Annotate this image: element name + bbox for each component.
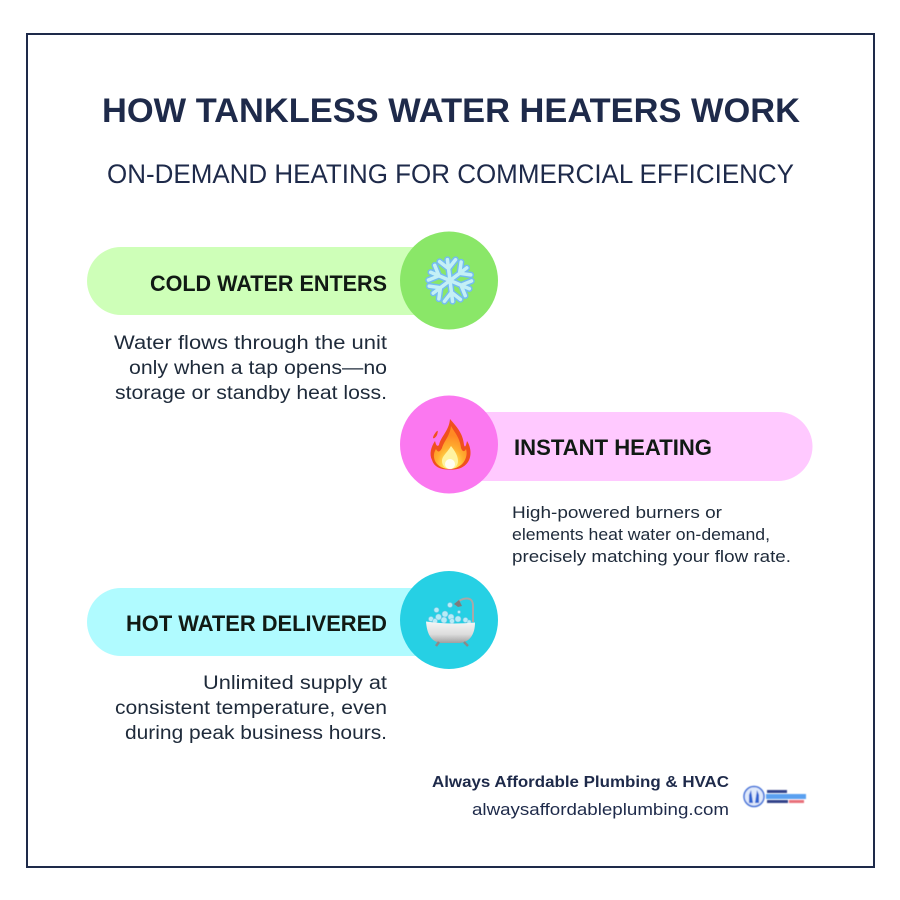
step 2: instant heating	[400, 396, 813, 566]
description: hot water: during peak business hours.	[125, 723, 387, 744]
icon: snowflake	[425, 257, 475, 304]
circle: pink	[400, 396, 498, 494]
description: cold water	[114, 333, 388, 404]
pill: instant heating	[470, 412, 813, 481]
pill: hot water	[87, 588, 430, 656]
footer: company name: Always Affordable Plumbing & HVAC	[432, 774, 729, 791]
description: cold water: Water flows through the unit	[114, 333, 388, 354]
circle: green	[400, 232, 498, 330]
description: instant heating	[512, 503, 791, 566]
description: hot water: Unlimited supply at	[203, 673, 388, 694]
heading: instant heating: INSTANT HEATING	[514, 435, 712, 460]
subtitle: ON-DEMAND HEATING FOR COMMERCIAL EFFICIENCY	[107, 159, 794, 189]
flame flick	[433, 431, 438, 438]
description: instant heating: precisely matching your flow rate.	[512, 547, 791, 566]
description: instant heating: High-powered burners or	[512, 503, 722, 522]
description: hot water: consistent temperature, even	[115, 698, 387, 719]
step 3: hot water delivered	[87, 571, 498, 744]
footer: website: alwaysaffordableplumbing.com	[472, 800, 729, 819]
icon: flame	[431, 419, 471, 470]
circle: cyan	[400, 571, 498, 669]
heading: cold water enters: COLD WATER ENTERS	[150, 271, 387, 296]
description: cold water: storage or standby heat loss.	[115, 383, 387, 404]
logo	[744, 786, 806, 806]
description: cold water: only when a tap opens—no	[129, 358, 387, 379]
description: instant heating: elements heat water on-demand,	[512, 525, 770, 544]
title: HOW TANKLESS WATER HEATERS WORK	[102, 92, 800, 130]
icon: bathtub	[426, 598, 475, 646]
pill: cold water	[87, 247, 430, 315]
description: hot water	[115, 673, 388, 744]
step 1: cold water enters	[87, 232, 498, 404]
heading: hot water delivered: HOT WATER DELIVERED	[126, 611, 387, 636]
